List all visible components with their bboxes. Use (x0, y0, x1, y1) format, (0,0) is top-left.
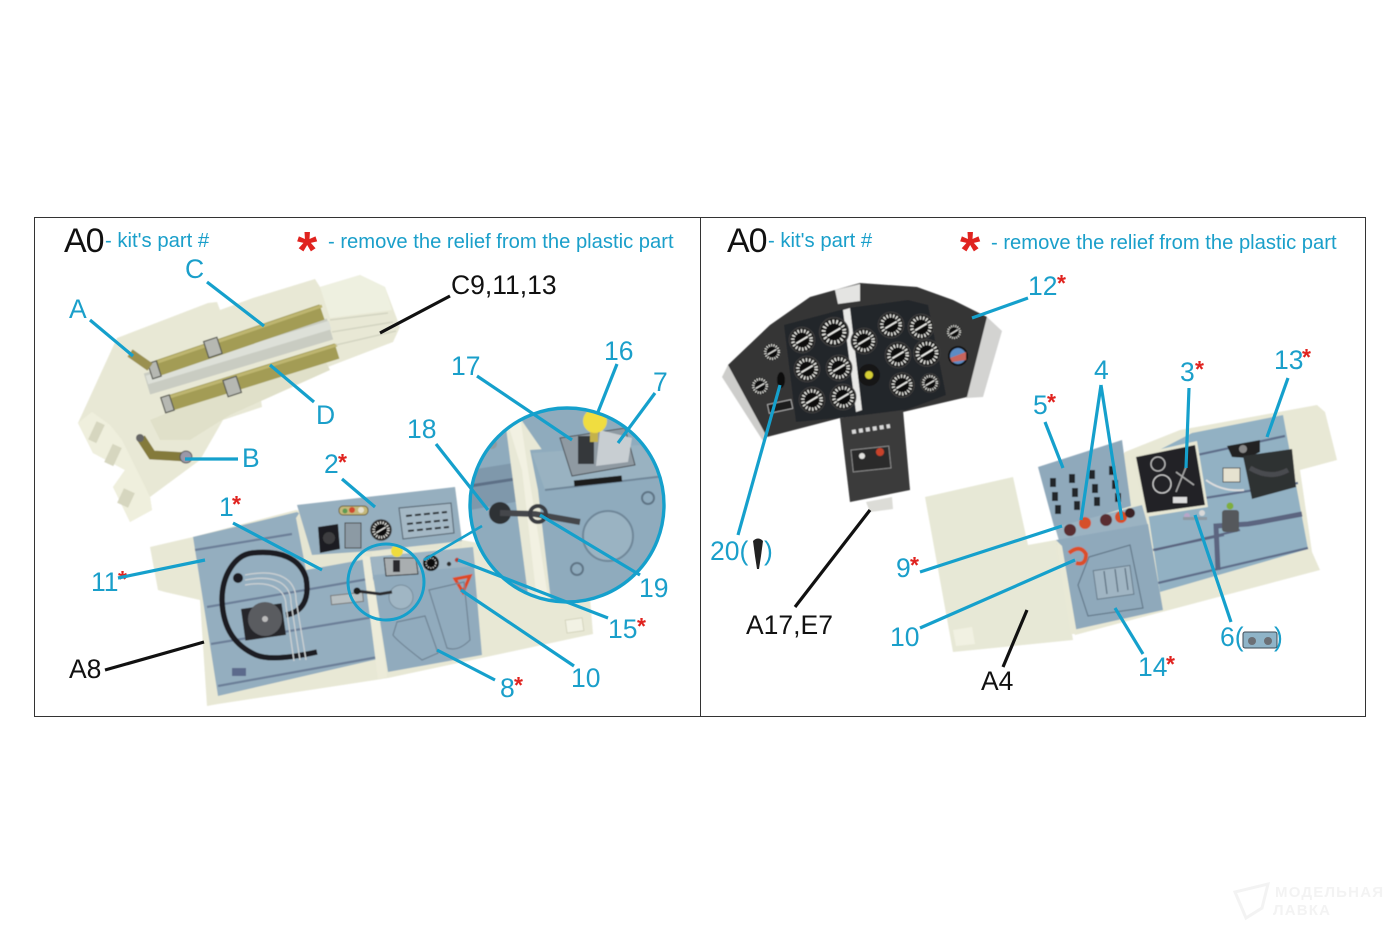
watermark (1235, 884, 1384, 919)
label 3*: * (1195, 356, 1204, 382)
label 13*: * (1302, 344, 1311, 370)
label D (270, 365, 335, 430)
label A: A (69, 294, 87, 324)
label 13*: 13 (1274, 345, 1303, 375)
label 1* (219, 491, 322, 570)
legend: right panel: - remove the relief from the plastic part (991, 232, 1337, 254)
label 20 with knob icon: 20( (710, 536, 748, 566)
label 14*: * (1166, 651, 1175, 677)
label A4: A4 (981, 666, 1013, 696)
watermark: ЛАВКА (1273, 902, 1331, 919)
legend: right panel (727, 222, 1337, 280)
label A8 (69, 642, 204, 684)
label 3* (1180, 356, 1204, 468)
legend: right panel: - kit's part # (768, 230, 873, 252)
label 7 (618, 367, 668, 443)
zoomed detail circle (348, 408, 670, 620)
legend: left panel: - kit's part # (105, 230, 210, 252)
label 18 (407, 414, 488, 510)
label 2* (324, 449, 375, 507)
label 17: 17 (451, 351, 480, 381)
label B: B (242, 443, 260, 473)
label C9,11,13: C9,11,13 (451, 270, 557, 300)
label 9*: 9 (896, 553, 911, 583)
label 4: 4 (1094, 355, 1109, 385)
label 14* (1115, 608, 1175, 682)
legend: left panel: * (297, 222, 318, 280)
label 17 (451, 351, 572, 440)
label 20 with knob icon: ) (764, 536, 773, 566)
label D: D (316, 400, 335, 430)
label 19 (540, 515, 668, 603)
switches: panel 5 (1050, 466, 1121, 514)
part: instrument panel A17,E7 (722, 283, 1002, 512)
label 7: 7 (653, 367, 668, 397)
label 1*: 1 (219, 492, 234, 522)
gauges (751, 312, 967, 413)
label 3*: 3 (1180, 357, 1195, 387)
label B (185, 443, 260, 473)
label 16: 16 (604, 336, 633, 366)
part: headset cable coil (222, 552, 317, 661)
label 20 with knob icon (710, 385, 780, 569)
label 19: 19 (639, 573, 668, 603)
label 6 with part icon (1195, 515, 1283, 652)
legend: right panel: * (960, 222, 981, 280)
part: red handle and door outlines (393, 576, 470, 660)
label 15*: 15 (608, 614, 637, 644)
label 12*: 12 (1028, 271, 1057, 301)
label 15*: * (637, 613, 646, 639)
label 13* (1267, 344, 1311, 437)
frame: two panels (34, 217, 1366, 717)
label 10 left: 10 (571, 663, 600, 693)
label 5*: 5 (1033, 390, 1048, 420)
label 14*: 14 (1138, 652, 1167, 682)
part: red handle and door (1069, 545, 1143, 616)
label 5* (1033, 389, 1063, 468)
part: radio panel (1130, 441, 1208, 517)
label 5*: * (1047, 389, 1056, 415)
label 8*: 8 (500, 673, 515, 703)
label A17,E7: A17,E7 (746, 610, 833, 640)
label 10 left (461, 590, 600, 693)
label C9,11,13 (380, 270, 557, 333)
legend: left panel (64, 222, 674, 280)
label 2*: 2 (324, 449, 339, 479)
label A4 (981, 610, 1027, 696)
label 12*: * (1057, 270, 1066, 296)
label A17,E7 (746, 510, 870, 640)
label 8*: * (514, 672, 523, 698)
part: harness on seat C9,11,13 (78, 275, 400, 522)
part: right cockpit panel A4 (925, 405, 1337, 652)
label 12* (972, 270, 1066, 318)
label 6 with part icon: ) (1274, 622, 1283, 652)
label 11*: 11 (91, 567, 119, 597)
label 15* (458, 560, 646, 644)
label 8* (437, 650, 523, 703)
label 16 (598, 336, 633, 412)
red knobs: parts 4 (1064, 508, 1135, 536)
part: joystick on centre box (354, 545, 459, 609)
label 11*: * (118, 566, 127, 592)
label 18: 18 (407, 414, 436, 444)
watermark: МОДЕЛЬНАЯ (1275, 884, 1384, 901)
label 9* (896, 526, 1062, 583)
label 6 with part icon: 6( (1220, 622, 1244, 652)
part: left cockpit panel A8 (150, 487, 593, 706)
label C: C (185, 254, 204, 284)
label 4 (1081, 355, 1122, 520)
label 9*: * (910, 552, 919, 578)
label 2*: * (338, 449, 347, 475)
legend: left panel: - remove the relief from the plastic part (328, 231, 674, 253)
legend: left panel: A0 (64, 222, 104, 260)
label A (69, 294, 133, 356)
label 10 right: 10 (890, 622, 919, 652)
label 10 right (890, 560, 1075, 652)
label A8: A8 (69, 654, 101, 684)
label 11* (91, 560, 205, 597)
label C (185, 254, 264, 326)
legend: right panel: A0 (727, 222, 767, 260)
label 1*: * (232, 491, 241, 517)
